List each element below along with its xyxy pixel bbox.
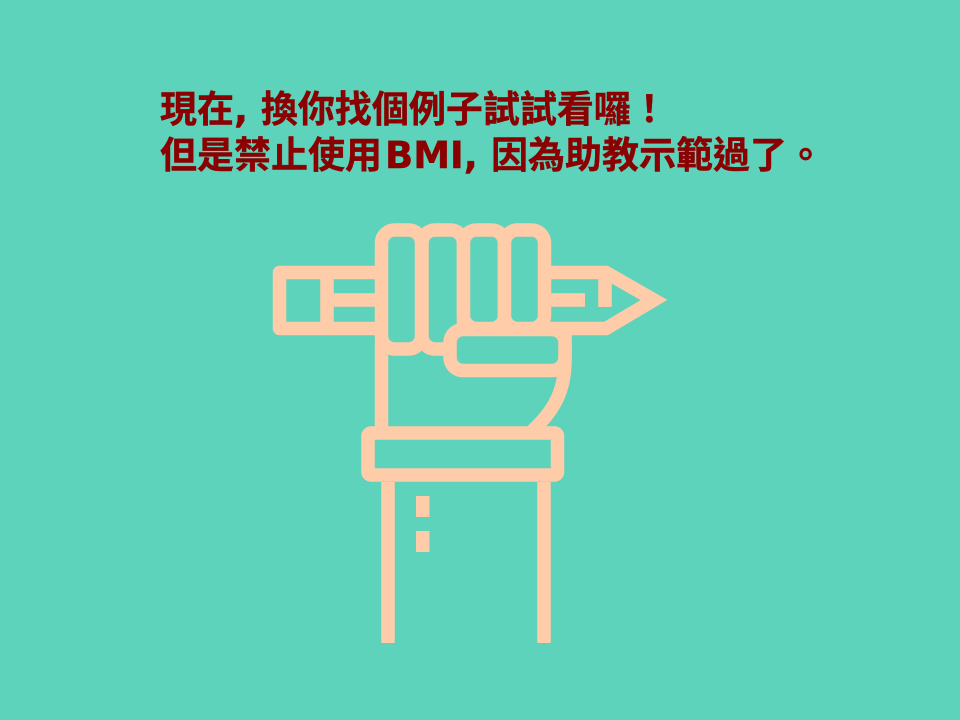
fingers <box>382 230 544 349</box>
pencil <box>280 272 654 328</box>
heading line 1: 現在, 換你找個例子試試看囉！ <box>160 88 668 131</box>
hand palm <box>382 335 565 433</box>
heading <box>160 88 824 177</box>
heading line 2: 因為助教示範過了。 <box>491 134 824 177</box>
forearm <box>388 482 544 643</box>
heading line 2: 但是禁止使用 <box>160 134 382 177</box>
heading line 2: BMI, <box>385 134 491 177</box>
icon: fist holding a pencil <box>280 230 654 643</box>
thumb <box>450 330 565 370</box>
sleeve marks <box>416 496 430 552</box>
wrist band <box>368 433 558 475</box>
